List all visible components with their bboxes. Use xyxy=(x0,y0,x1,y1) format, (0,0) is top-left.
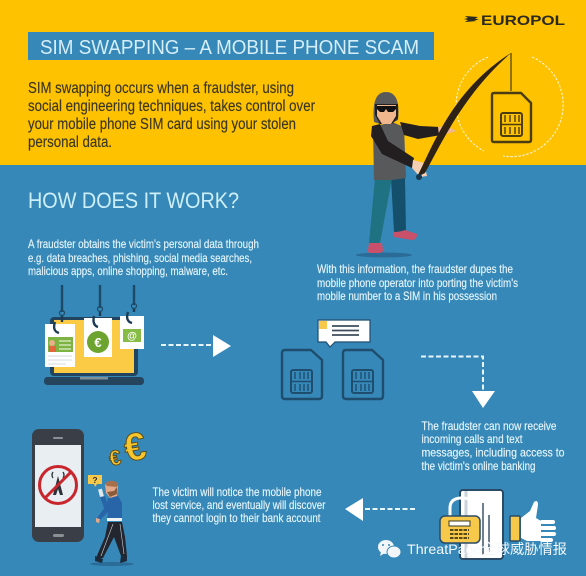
arrow: step 3 to step 4 xyxy=(345,498,415,521)
step 4 text xyxy=(152,486,326,525)
SIM card left xyxy=(282,350,322,399)
card: identity xyxy=(45,324,75,367)
card: euro: € xyxy=(94,335,102,350)
arrow: step 1 to step 2 xyxy=(161,335,231,357)
hooks xyxy=(54,304,136,333)
far hand xyxy=(438,126,457,135)
icon: two SIM cards with message bubble xyxy=(282,320,383,399)
near hand xyxy=(412,160,427,177)
step 2 text: mobile number to a SIM in his possession xyxy=(317,290,497,303)
step 3 text: messages, including access to xyxy=(422,446,564,460)
step 3 text: the victim's online banking xyxy=(422,460,536,473)
step 1 text: malicious apps, online shopping, malware, etc. xyxy=(28,265,228,278)
thumbs up xyxy=(510,501,554,541)
sunglasses xyxy=(377,106,396,112)
icon: euro symbols: € xyxy=(107,446,123,471)
step 4 text: The victim will notice the mobile phone xyxy=(152,486,322,499)
no-signal tower xyxy=(40,466,76,504)
icon: euro symbols: € xyxy=(121,424,150,471)
near shoe xyxy=(368,243,383,253)
title banner: SIM SWAPPING – A MOBILE PHONE SCAM xyxy=(40,37,419,59)
message bubble xyxy=(318,320,370,347)
far arm xyxy=(400,122,441,139)
yellow header panel xyxy=(0,0,586,165)
step 1 text xyxy=(28,238,259,278)
SIM card right xyxy=(343,350,383,399)
intro text: personal data. xyxy=(28,134,112,151)
icon: euro symbols xyxy=(107,424,150,471)
intro text: your mobile phone SIM card using your stolen xyxy=(28,116,296,133)
head xyxy=(105,481,118,498)
far leg xyxy=(391,178,406,232)
step 4 text: they cannot login to their bank account xyxy=(152,512,321,525)
fishing rod xyxy=(417,53,511,177)
step 2 text: mobile phone operator into porting the victim's xyxy=(317,277,518,290)
torso xyxy=(373,122,406,180)
illustration: hooded fraudster with fishing rod xyxy=(356,53,511,258)
arrow: step 2 to step 3 xyxy=(421,356,495,408)
intro text: social engineering techniques, takes control over xyxy=(28,98,315,115)
face xyxy=(377,105,396,124)
card: email: @ xyxy=(127,331,137,342)
heading: how does it work: HOW DOES IT WORK? xyxy=(28,188,239,213)
step 3 text: incoming calls and text xyxy=(422,433,523,446)
far shoe xyxy=(394,230,417,240)
near leg xyxy=(369,178,392,243)
hoodie xyxy=(97,496,122,521)
icon: WeChat watermark xyxy=(378,540,401,558)
watermark text: ThreatPage全球威胁情报 xyxy=(407,541,567,557)
blue background panel xyxy=(0,164,586,576)
step 1 text: A fraudster obtains the victim's personal data through xyxy=(28,238,259,251)
logo: Europol: EUROPOL xyxy=(481,12,566,28)
icon: laptop with hooked data cards xyxy=(44,285,144,385)
near arm xyxy=(371,124,414,168)
step 2 text: With this information, the fraudster dupes the xyxy=(317,263,513,276)
step 4 text: lost service, and eventually will discover xyxy=(152,499,326,512)
logo: Europol xyxy=(464,12,566,28)
phone in hand xyxy=(98,489,104,497)
intro text: SIM swapping occurs when a fraudster, using xyxy=(28,80,294,97)
illustration: confused victim walking with phone xyxy=(88,475,134,566)
icon: smartphone with no signal xyxy=(32,429,84,542)
step 3 text xyxy=(422,420,564,473)
padlock xyxy=(440,498,480,543)
illustration: SIM card on hook inside dashed circle xyxy=(456,53,563,157)
shoes xyxy=(95,556,103,563)
step 1 text: e.g. data breaches, phishing, social media searches, xyxy=(28,252,252,265)
step 2 text xyxy=(317,263,518,303)
question bubble: ? xyxy=(92,475,98,485)
intro text xyxy=(28,80,315,151)
step 3 text: The fraudster can now receive xyxy=(422,420,556,433)
legs xyxy=(96,522,127,558)
hood xyxy=(374,92,398,124)
icon: padlock, bank card and thumbs up xyxy=(440,490,554,559)
